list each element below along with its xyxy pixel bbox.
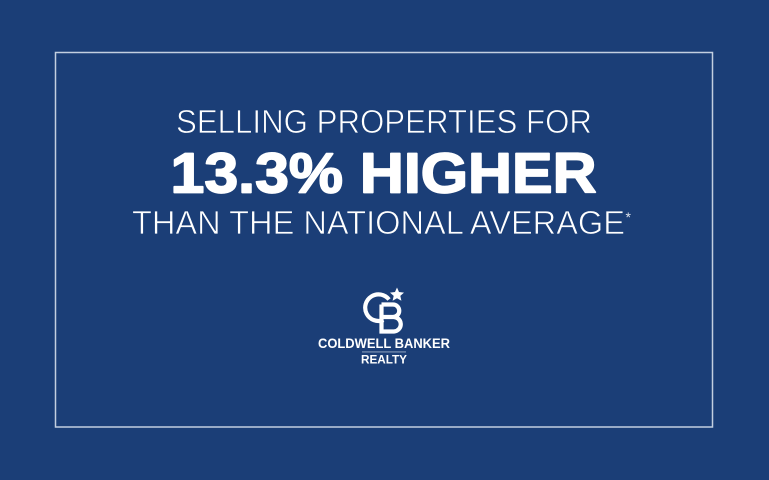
subheading: than the national average: * bbox=[626, 209, 632, 225]
icon: CB monogram with star bbox=[365, 288, 404, 332]
brand sub-name: REALTY bbox=[361, 354, 407, 366]
logo: Coldwell Banker Realty bbox=[318, 288, 450, 366]
headline statistic: 13.3% higher: 13.3% HIGHER bbox=[170, 142, 596, 206]
subheading: than the national average: THAN THE NATIONAL AVERAGE bbox=[132, 204, 625, 241]
heading: selling properties for: SELLING PROPERTIES FOR bbox=[176, 103, 592, 140]
brand name: COLDWELL BANKER bbox=[318, 336, 450, 351]
panel: outlined frame bbox=[56, 52, 712, 427]
